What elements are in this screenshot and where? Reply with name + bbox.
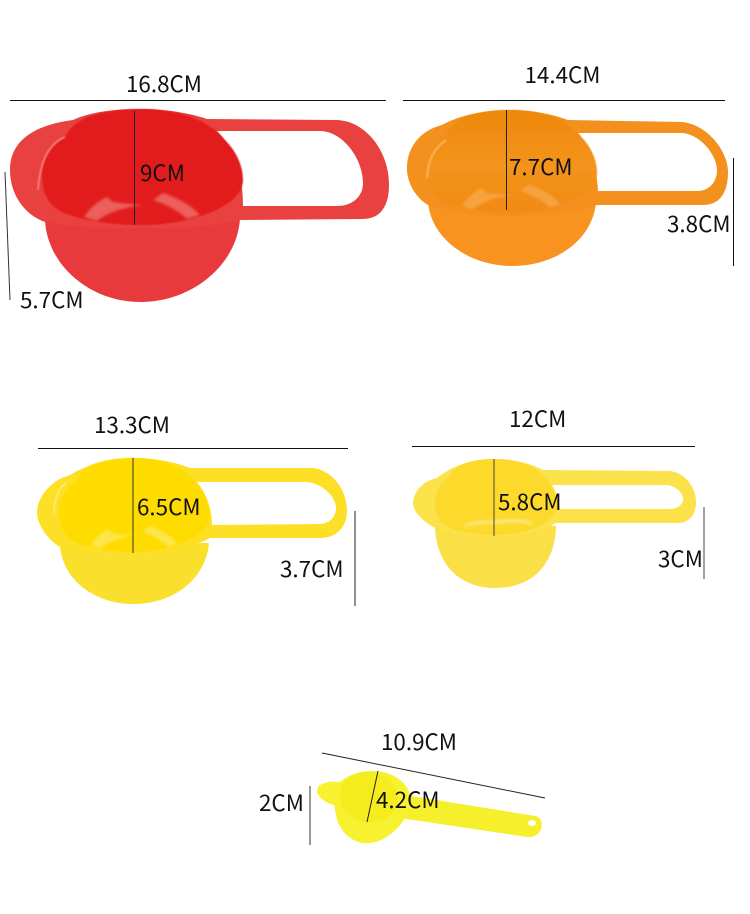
dimension line: 12CM xyxy=(412,446,695,448)
icon: red bowl highlights xyxy=(84,193,200,221)
icon: yellow bowl body xyxy=(60,543,209,604)
dimension line: 3.7CM xyxy=(354,511,356,606)
dimension line: 6.5CM xyxy=(132,458,134,553)
label: 5.7CM: 5.7CM xyxy=(20,283,84,315)
icon: yellow rim groove xyxy=(54,483,66,515)
dimension line: 14.4CM xyxy=(403,100,725,102)
label: 14.4CM: 14.4CM xyxy=(524,58,600,90)
small yellow scoop with dimensions xyxy=(259,725,545,845)
icon: red rim and handle xyxy=(10,109,389,229)
icon: yellow bowl interior xyxy=(59,458,210,552)
label: 2CM: 2CM xyxy=(259,786,304,818)
icon: small scoop bowl xyxy=(317,771,411,843)
orange cup with dimensions xyxy=(403,58,734,266)
label: 12CM: 12CM xyxy=(509,402,566,434)
label: 3CM: 3CM xyxy=(658,542,703,574)
icon: orange bowl body xyxy=(428,203,596,266)
dimension line: 2CM xyxy=(309,786,311,845)
icon: medium yellow bowl interior xyxy=(435,459,557,535)
label: 7.7CM: 7.7CM xyxy=(509,150,573,182)
dimension line: 9CM xyxy=(134,111,136,225)
label: 4.2CM: 4.2CM xyxy=(376,783,440,815)
label: 3.8CM: 3.8CM xyxy=(667,207,731,239)
icon: small scoop handle xyxy=(400,795,542,837)
dimension line: 3CM xyxy=(703,507,705,579)
icon: red bowl interior xyxy=(42,109,243,225)
label: 3.7CM: 3.7CM xyxy=(280,552,344,584)
icon: orange rim and handle xyxy=(407,110,728,216)
label: 10.9CM: 10.9CM xyxy=(381,725,457,757)
dimension line: 7.7CM xyxy=(506,110,508,210)
dimension line: 13.3CM xyxy=(38,448,348,450)
label: 5.8CM: 5.8CM xyxy=(498,485,562,517)
icon: orange bowl highlights xyxy=(462,185,560,209)
dimension line: 4.2CM xyxy=(367,771,378,822)
icon: medium yellow bowl highlights xyxy=(462,519,534,528)
icon: orange bowl interior xyxy=(426,110,597,213)
icon: yellow rim and handle xyxy=(37,458,347,553)
icon: red bowl body xyxy=(45,218,240,302)
icon: medium yellow rim and handle xyxy=(413,459,696,537)
medium yellow cup with dimensions xyxy=(412,402,704,588)
label: 6.5CM: 6.5CM xyxy=(137,490,201,522)
label: 9CM: 9CM xyxy=(140,156,185,188)
icon: medium yellow bowl body xyxy=(435,526,556,588)
label: 16.8CM: 16.8CM xyxy=(126,67,202,99)
large yellow cup with dimensions xyxy=(37,408,355,606)
icon: small scoop interior xyxy=(336,767,402,827)
label: 13.3CM: 13.3CM xyxy=(94,408,170,440)
icon: yellow bowl highlights xyxy=(91,526,178,549)
red cup with dimensions xyxy=(5,67,389,315)
dimension line: 5.8CM xyxy=(493,459,495,536)
dimension line: 10.9CM xyxy=(322,753,545,798)
dimension line: 16.8CM xyxy=(10,100,386,102)
dimension line: 3.8CM xyxy=(732,158,734,266)
icon: orange rim groove xyxy=(427,140,446,178)
icon: red rim groove xyxy=(38,137,65,190)
dimension line: 5.7CM xyxy=(5,172,10,300)
